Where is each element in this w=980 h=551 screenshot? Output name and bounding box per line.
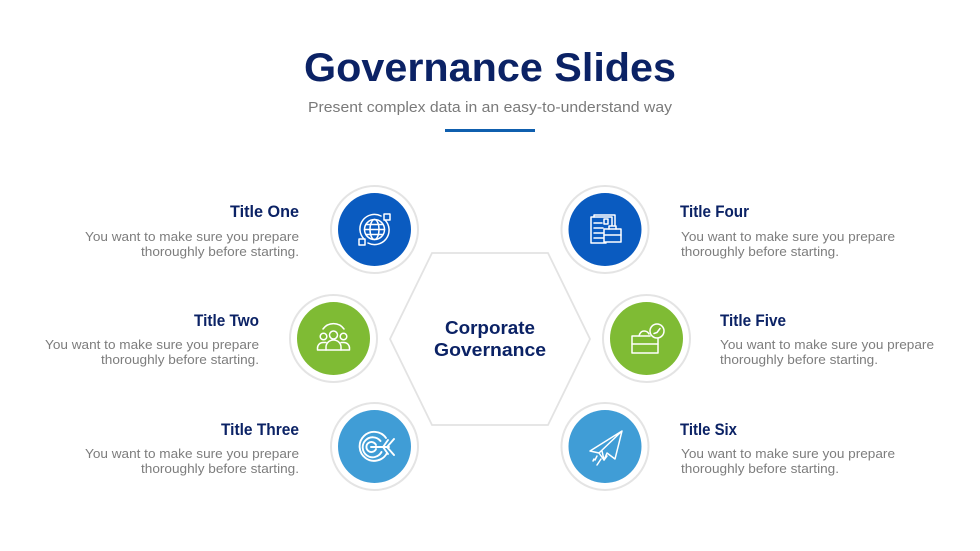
item: Title Three [85, 403, 418, 490]
text: Title Six: You want to make sure you prepare [681, 446, 895, 461]
text: Title Two: You want to make sure you prepare [45, 337, 259, 352]
item: Title One [85, 186, 418, 273]
text: Title Three: Title Three [221, 421, 299, 439]
hexagon label: Corporate [445, 317, 535, 338]
text: Title Five: You want to make sure you prepare [720, 337, 934, 352]
text: Title Four: thoroughly before starting. [681, 244, 839, 259]
text: Title Two: Title Two [194, 312, 259, 330]
text: Title Four: Title Four [680, 203, 750, 221]
text: Title Five [720, 312, 934, 367]
text: Title One [85, 203, 299, 259]
text: Title Four [680, 203, 895, 259]
icon: target [331, 403, 418, 490]
icon: team [290, 295, 377, 382]
text: Title Five: Title Five [720, 312, 786, 330]
text: Title One: Title One [230, 203, 299, 221]
text: Title Three: You want to make sure you prepare [85, 446, 299, 461]
text: Title Four: You want to make sure you prepare [681, 229, 895, 244]
item: Title Six [562, 403, 895, 490]
text: Title Three [85, 421, 299, 476]
item: Title Four [562, 186, 895, 273]
text: Title Two [45, 312, 259, 367]
icon: documents and briefcase [562, 186, 648, 273]
text: Title Five: thoroughly before starting. [720, 352, 878, 367]
item: Title Five [603, 295, 934, 382]
text: Title Six [680, 421, 895, 476]
text: Title Six: Title Six [680, 421, 738, 439]
hexagon label: Governance [434, 339, 546, 360]
text: Title Six: thoroughly before starting. [681, 461, 839, 476]
item: Title Two [45, 295, 377, 382]
text: Title Three: thoroughly before starting. [141, 461, 299, 476]
text: Title Two: thoroughly before starting. [101, 352, 259, 367]
icon: briefcase with clock [603, 295, 690, 382]
text: Title One: You want to make sure you prepare [85, 229, 299, 244]
title: Governance Slides [304, 46, 676, 90]
icon: globe [331, 186, 418, 273]
title underline [445, 129, 535, 132]
central hexagon [390, 253, 590, 425]
subtitle: Present complex data in an easy-to-understand way [308, 99, 673, 116]
hexagon label [434, 317, 546, 360]
text: Title One: thoroughly before starting. [141, 244, 299, 259]
icon: paper plane [562, 403, 648, 490]
